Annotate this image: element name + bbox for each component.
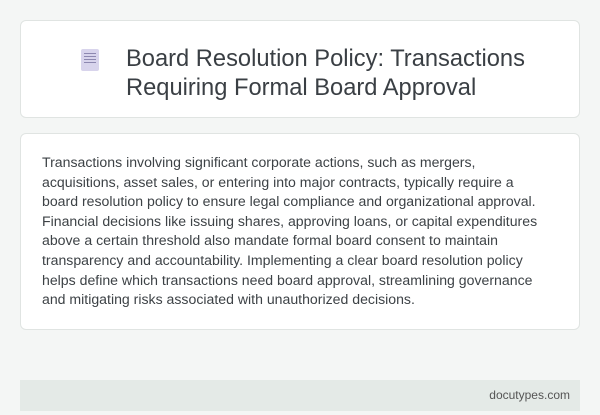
icon: document [81, 49, 99, 71]
panel: header [20, 20, 580, 118]
text block: Transactions involving significant corporate actions, such as mergers, [42, 154, 475, 170]
footer [20, 380, 580, 411]
panel: body text [20, 133, 580, 330]
text block: board resolution policy to ensure legal compliance and organizational approval. [42, 193, 536, 209]
text block [42, 154, 537, 307]
text block: and mitigating risks associated with unauthorized decisions. [42, 291, 415, 307]
text block: transparency and accountability. Implementing a clear board resolution policy [42, 252, 523, 268]
text block: helps define which transactions need board approval, streamlining governance [42, 272, 532, 288]
text block: acquisitions, asset sales, or entering into major contracts, typically require a [42, 174, 514, 190]
text block: Financial decisions like issuing shares, approving loans, or capital expenditures [42, 213, 537, 229]
title [126, 46, 525, 101]
title: Requiring Formal Board Approval [126, 75, 476, 101]
title: Board Resolution Policy: Transactions [126, 46, 525, 72]
text block: above a certain threshold also mandate formal board consent to maintain [42, 232, 498, 248]
footer text: docutypes.com [489, 388, 570, 402]
